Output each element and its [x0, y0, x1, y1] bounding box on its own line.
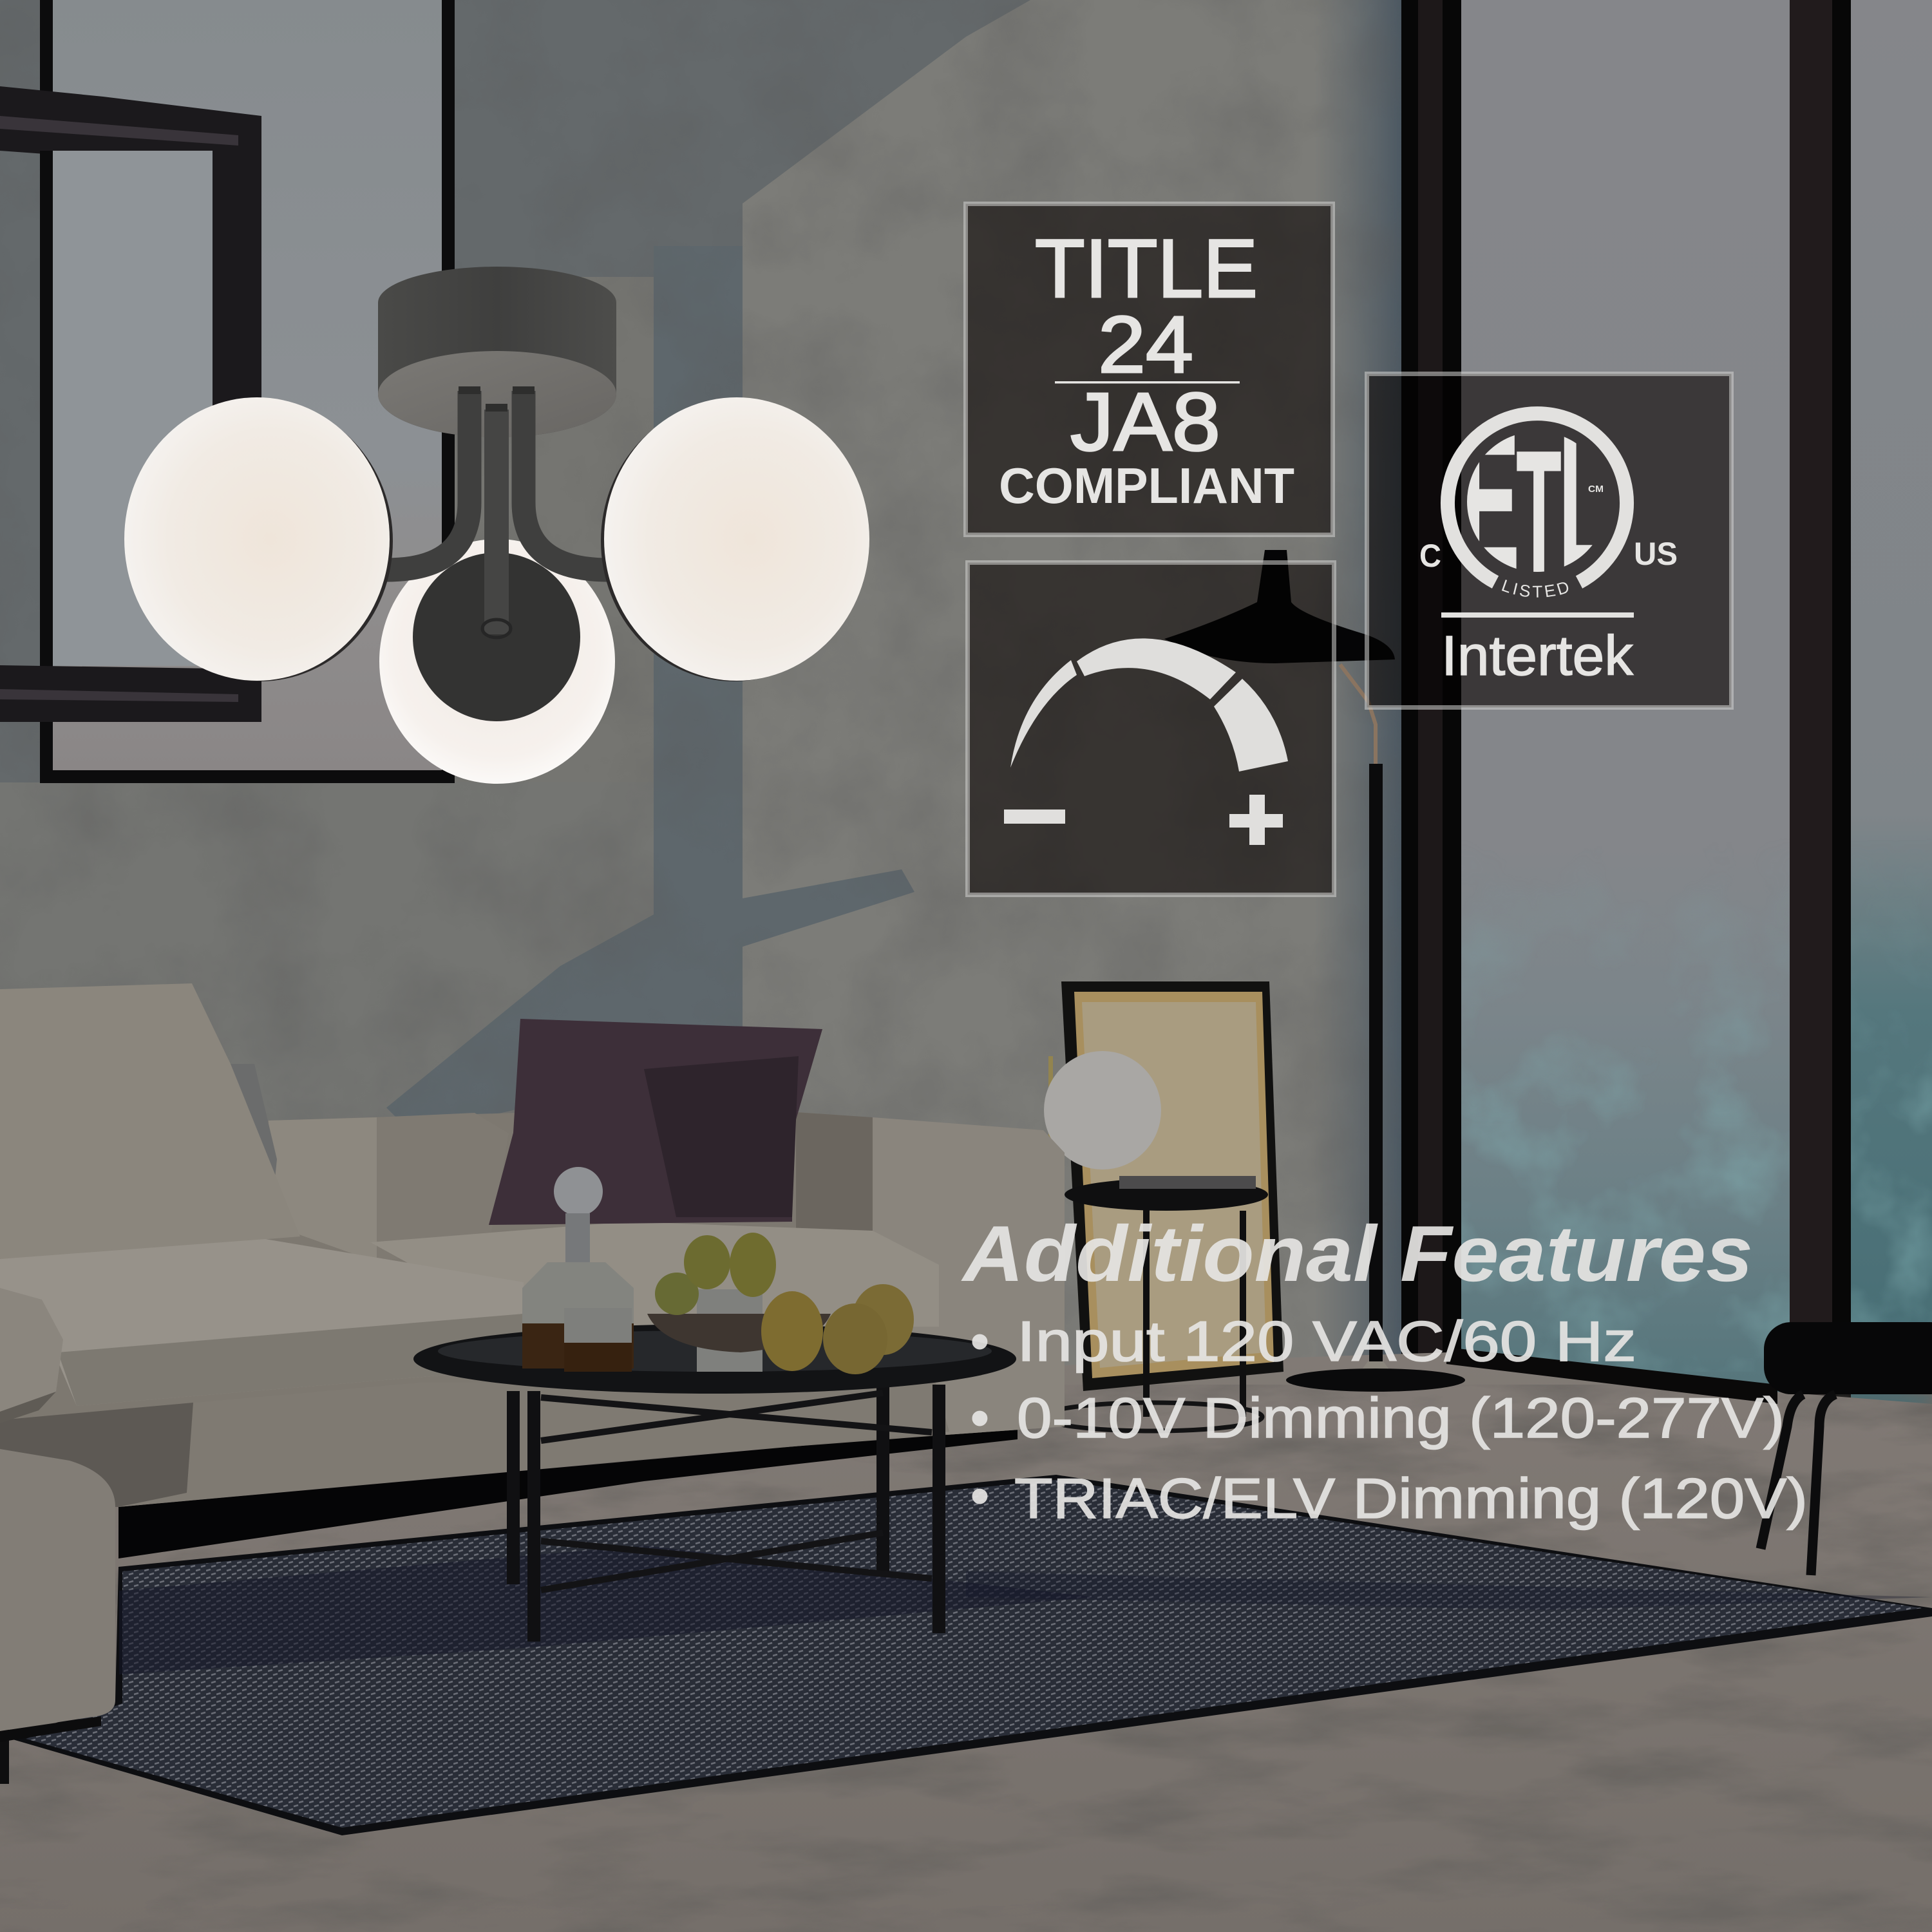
ceiling light fixture [124, 267, 869, 784]
text: US: US [1634, 536, 1678, 572]
rug [13, 1475, 1932, 1835]
left globe [124, 397, 393, 681]
sofa [0, 983, 1065, 1558]
icon: ETL ring [1448, 413, 1627, 582]
panel: Title 24 JA8 compliant [966, 204, 1333, 535]
decanter and glasses [522, 1167, 762, 1372]
text: TITLE: TITLE [1035, 223, 1258, 315]
text: JA8: JA8 [1070, 376, 1220, 468]
text: CM: CM [1588, 484, 1604, 495]
text: COMPLIANT: COMPLIANT [999, 457, 1294, 514]
text: 24: 24 [1098, 300, 1193, 390]
text: ETL mark: E [1461, 390, 1520, 612]
side arms [386, 390, 609, 570]
panel: ETL Intertek listing [1365, 372, 1734, 710]
icon: plus [1229, 795, 1283, 845]
bottom globe [379, 539, 615, 784]
icon: dimmer arc [1010, 638, 1288, 772]
right globe [601, 397, 869, 681]
list item: TRIAC/ELV dimming: TRIAC/ELV Dimming (120V) [1014, 1466, 1808, 1530]
background: concrete wall [0, 0, 1404, 1481]
coffee table [413, 1324, 1016, 1642]
heading: Additional Features [961, 1210, 1753, 1298]
list item: 0-10V dimming: 0-10V Dimming (120-277V) [1017, 1386, 1785, 1450]
leaning canvas [1061, 981, 1283, 1391]
list item: input: Input 120 VAC/60 Hz [1017, 1309, 1636, 1373]
background: window with foggy forest [1401, 0, 1932, 1417]
panel: dimming icon [967, 563, 1334, 895]
list item: TRIAC/ELV dimming: • [970, 1464, 990, 1528]
floor lamp [1164, 550, 1465, 1392]
list item: input: • [970, 1309, 990, 1373]
text: Intertek: Intertek [1441, 625, 1633, 687]
stool [1761, 1322, 1932, 1575]
purple pillow [489, 1019, 822, 1225]
floor [0, 1347, 1932, 1932]
center arm [482, 408, 511, 638]
canopy [378, 267, 616, 437]
dark wood picture frame [0, 86, 261, 722]
side table with globe lamp [1043, 1051, 1268, 1431]
icon: minus [1004, 810, 1065, 824]
armchair foreground [0, 1449, 115, 1784]
text: LISTED: LISTED [1502, 580, 1569, 598]
text: ETL mark: L [1558, 390, 1610, 609]
text block: additional features [961, 1210, 1808, 1530]
text: ETL mark [1467, 435, 1593, 572]
text: ETL mark: T [1516, 414, 1562, 609]
wall poster with black frame [46, 0, 448, 777]
list item: 0-10V dimming: • [970, 1386, 990, 1450]
text: C: C [1419, 538, 1441, 574]
fruit bowl [647, 1233, 914, 1374]
